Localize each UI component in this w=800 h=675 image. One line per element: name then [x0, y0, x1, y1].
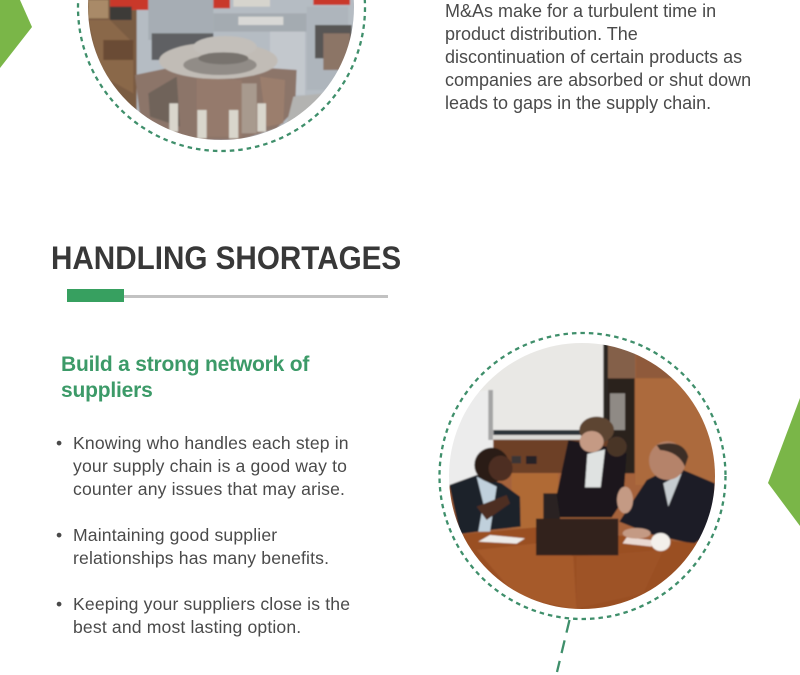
man right — [619, 470, 715, 544]
heading: handling shortages: HANDLING SHORTAGES — [51, 240, 401, 276]
bottom circular photo: business meeting — [440, 333, 726, 619]
bullet: knowing who handles: • — [56, 433, 62, 453]
bullet: supplier relationships: relationships has many benefits. — [73, 548, 329, 568]
subheading: build a strong network: Build a strong network of — [61, 353, 309, 376]
text: mergers and acquisitions paragraph: companies are absorbed or shut down — [445, 70, 751, 90]
table — [463, 527, 696, 609]
top circular photo: machinery — [78, 0, 367, 157]
icon: left green triangle — [0, 0, 32, 68]
man left — [449, 475, 521, 534]
bullet: keeping suppliers close: best and most lasting option. — [73, 617, 301, 637]
heading underline — [67, 289, 388, 302]
bullet: knowing who handles: counter any issues that may arise. — [73, 479, 345, 499]
bullet: keeping suppliers close: Keeping your suppliers close is the — [73, 594, 350, 614]
bullet: keeping suppliers close: • — [56, 594, 62, 614]
subheading: build a strong network: suppliers — [61, 379, 153, 402]
bullet: knowing who handles: Knowing who handles each step in — [73, 433, 349, 453]
bullet: supplier relationships — [56, 525, 329, 568]
bullet: knowing who handles — [56, 433, 349, 499]
text: mergers and acquisitions paragraph: leads to gaps in the supply chain. — [445, 93, 711, 113]
bullet: supplier relationships: Maintaining good supplier — [73, 525, 277, 545]
bullet list — [56, 433, 350, 637]
text: mergers and acquisitions paragraph: product distribution. The — [445, 24, 638, 44]
bullet: knowing who handles: your supply chain is a good way to — [73, 456, 347, 476]
dashed connector arrow — [557, 620, 570, 672]
woman — [557, 440, 627, 517]
text: mergers and acquisitions paragraph: discontinuation of certain products as — [445, 47, 742, 67]
text: mergers and acquisitions paragraph: M&As make for a turbulent time in — [445, 1, 716, 21]
icon: right green triangle — [768, 398, 800, 526]
text: mergers and acquisitions paragraph — [445, 1, 751, 113]
bullet: keeping suppliers close — [56, 594, 350, 637]
bullet: supplier relationships: • — [56, 525, 62, 545]
subheading: build a strong network — [61, 353, 310, 402]
